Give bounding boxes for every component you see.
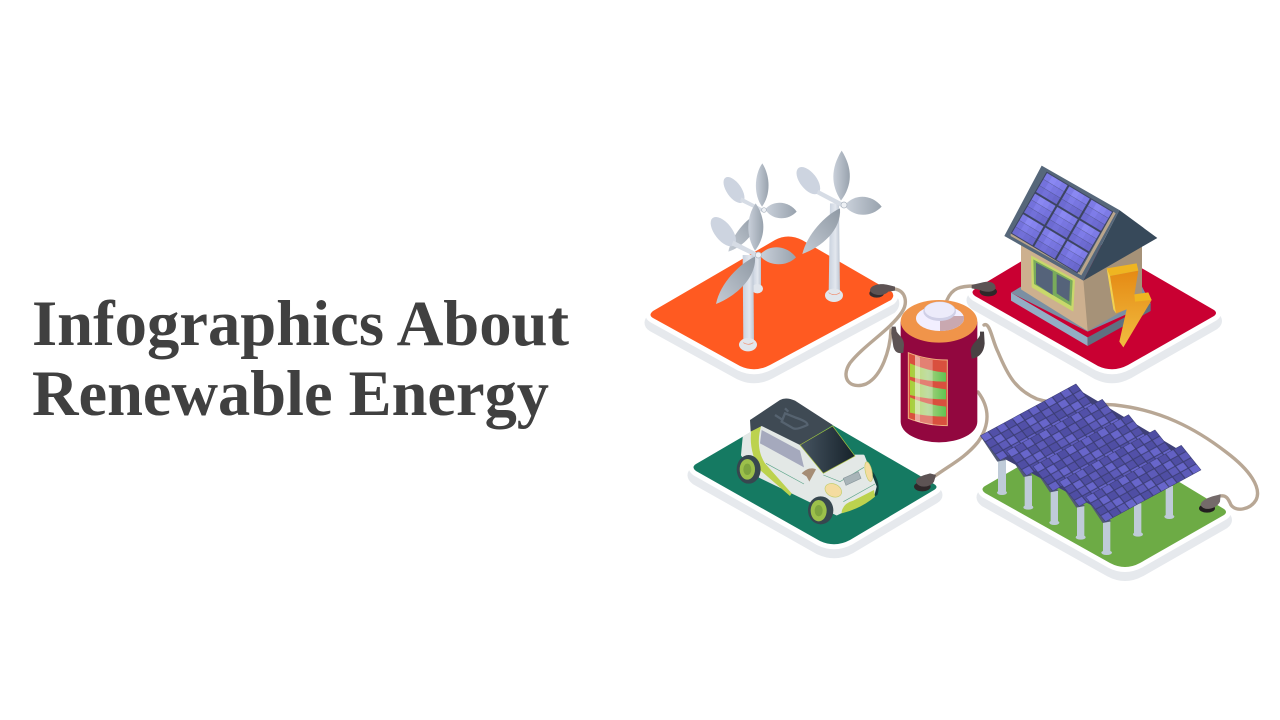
rear wheel [737,455,761,484]
platform: house base [972,234,1216,377]
roof gable [1083,210,1157,281]
roof edge strip [1011,212,1116,275]
window [1031,255,1075,312]
platform: solar field base [982,430,1226,575]
solar panel array [980,384,1201,522]
car windshield [800,426,855,473]
mirror [802,468,816,482]
wind turbines [706,151,895,351]
battery body [901,322,977,442]
lightning bolt [1107,263,1152,347]
array backing [983,387,1190,513]
connecting cables [846,286,1258,509]
solar field [980,384,1221,555]
platform: wind farm base [650,236,893,377]
title: Infographics About [32,288,569,360]
car door trim [751,423,792,496]
battery [891,300,985,442]
charge window [908,353,947,426]
rooftop solar cells [1011,172,1113,273]
charge cell 1 [910,363,946,382]
battery terminal [916,302,964,331]
back turbine [719,163,797,293]
plug: solar platform [1199,494,1221,513]
house with rooftop solar [972,166,1157,347]
car body [742,427,875,514]
charge cell 3 [910,397,946,417]
plug icon on roof [775,408,807,429]
car roof [750,398,833,445]
electric car [737,398,936,524]
plug: house platform [972,282,997,296]
title [32,288,569,430]
plug: battery right [971,332,985,359]
charge cell 2 [910,380,946,399]
car side window [760,430,804,467]
house slab [1011,287,1151,346]
battery top [901,300,977,343]
plug: wind platform [869,284,895,298]
front bumper [842,490,875,513]
front turbine [706,203,796,351]
title: Renewable Energy [32,358,549,430]
panel undersides [980,436,1111,523]
plug: battery left [891,327,904,353]
right turbine [792,151,882,302]
support posts [997,460,1174,555]
car shadow [860,470,879,503]
roof frame [1004,166,1119,281]
house walls [1021,245,1142,331]
front wheel [808,496,833,524]
car body lines [766,463,875,502]
platform: electric car base [694,408,936,552]
headlights [823,461,874,500]
plug: car platform [914,473,936,491]
car grille [843,472,861,485]
